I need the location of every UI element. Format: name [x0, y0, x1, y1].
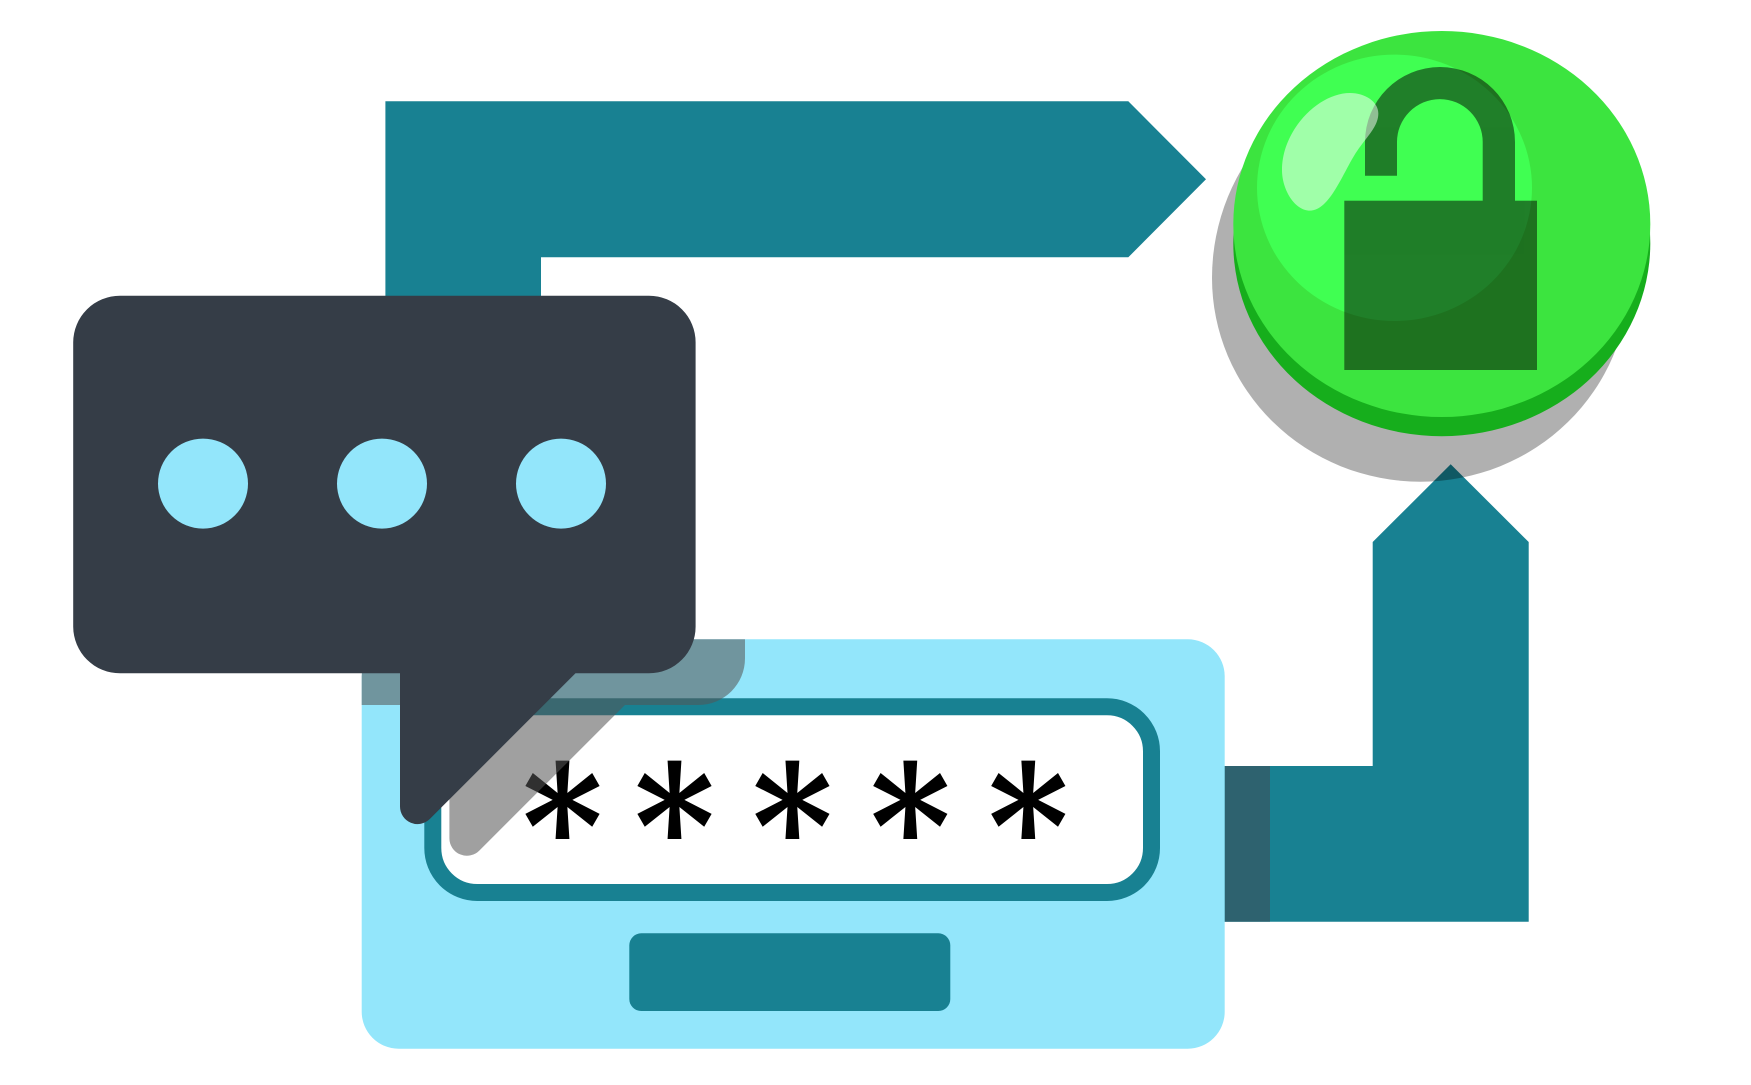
password input field [433, 707, 1152, 892]
badge face [1233, 31, 1650, 417]
masked password characters: * [752, 729, 833, 927]
arrow: password card to padlock [1220, 464, 1529, 922]
typing dot 1 [158, 439, 248, 529]
arrow: chat bubble to padlock [385, 101, 1206, 300]
icon: open padlock [1344, 67, 1537, 370]
masked password characters [522, 729, 1069, 927]
masked password characters: * [634, 729, 715, 927]
masked password characters: * [870, 729, 951, 927]
panel: password card [362, 639, 1225, 1049]
padlock badge [1212, 31, 1650, 482]
badge drop shadow [1212, 66, 1629, 482]
submit button [629, 933, 950, 1011]
masked password characters: * [988, 729, 1069, 927]
badge inner glow [1257, 55, 1532, 321]
badge specular highlight [1282, 93, 1378, 211]
chat bubble [73, 296, 696, 824]
typing dot 2 [337, 439, 427, 529]
badge rim [1233, 50, 1650, 436]
typing dot 3 [516, 439, 606, 529]
chat bubble shadow on card [362, 639, 745, 856]
masked password characters: * [522, 729, 603, 927]
arrow shadow strip [1225, 766, 1270, 922]
bubble body with tail [73, 296, 696, 824]
